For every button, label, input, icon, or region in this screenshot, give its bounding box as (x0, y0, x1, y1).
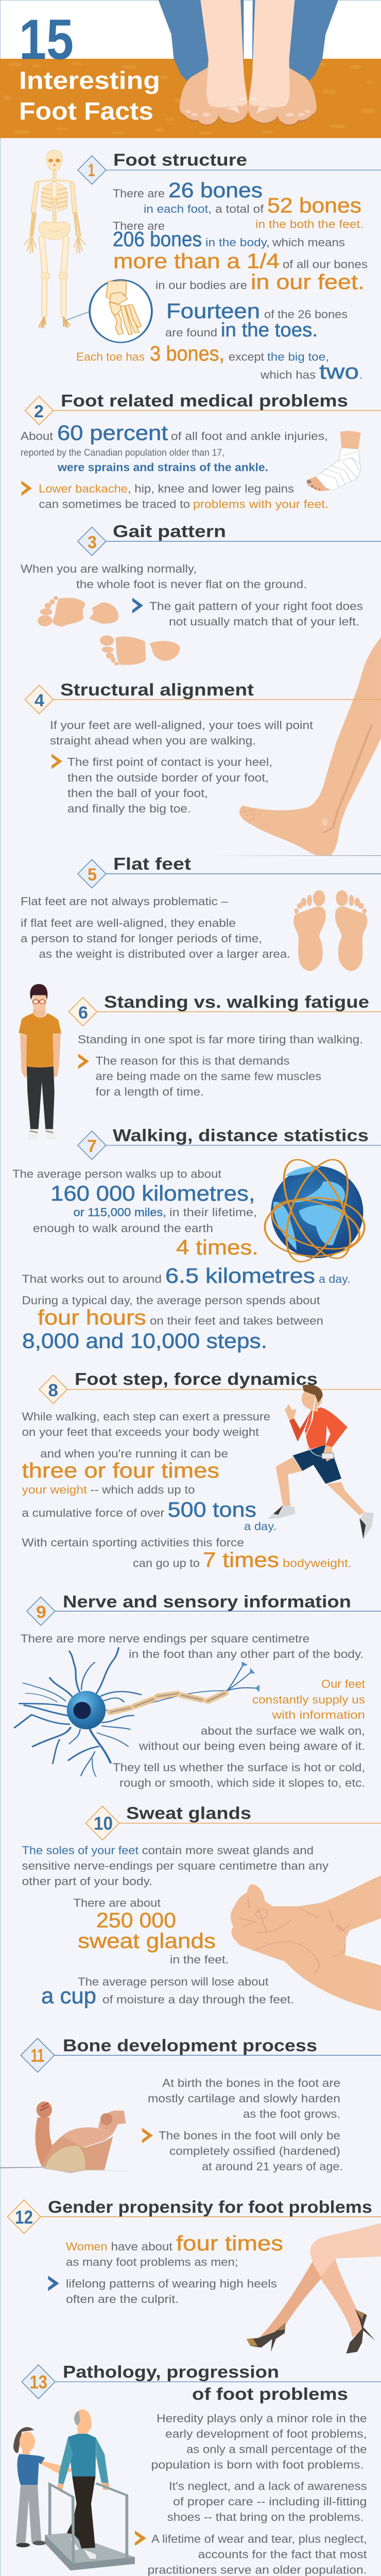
heading: Structural alignment (60, 680, 254, 699)
text block: sensitive nerve-endings per square centimetre than any (22, 1859, 328, 1872)
text block: back pain: , hip, knee and lower leg pains (128, 482, 294, 495)
text block: pressure: and when you're running it can be (40, 1447, 228, 1460)
text block: daily figures: four hours (38, 1306, 146, 1329)
text block: When you are walking normally, (21, 563, 197, 575)
text block: heredity: early development of foot problems, (165, 2428, 367, 2441)
text block: bone counts: in our feet. (251, 270, 365, 294)
illustration: legs in high heels (247, 2223, 381, 2353)
text block: 250 000 (96, 1908, 176, 1932)
text block: ossified (159, 2129, 343, 2173)
text block: contact order: then the ball of your foot, (67, 787, 208, 800)
text block: pressure (22, 1410, 352, 1572)
text block: bone counts: There are (113, 187, 165, 200)
text block: contact order (67, 756, 272, 815)
heading: Gait pattern (113, 522, 226, 541)
text block: pressure: on your feet that exceeds your body weight (22, 1426, 259, 1438)
text block: pressure: three or four times (22, 1459, 219, 1482)
text block: daily figures: 8,000 and 10,000 steps. (22, 1329, 267, 1353)
text block: bone counts: in the body, (205, 236, 270, 249)
text block: The average person will lose about (78, 1975, 269, 1988)
text block: nerve endings: constantly supply us (252, 1693, 365, 1706)
text block: bone counts: . (359, 368, 362, 381)
text block: ossified: at around 21 years of age. (202, 2160, 343, 2173)
text block: sprains (21, 421, 328, 473)
text block: heredity: as only a small percentage of the (186, 2443, 367, 2456)
text block (148, 2077, 340, 2121)
text block: The soles of your feet (22, 1844, 138, 1857)
icon: chevron (51, 754, 62, 769)
text block: wear and tear: accounts for the fact that most (198, 2548, 367, 2561)
badge 2: 2 (34, 402, 44, 421)
text block: nerve endings: rough or smooth, which side it slopes to, etc. (119, 1776, 365, 1789)
text block: pressure: While walking, each step can exert a pressure (22, 1410, 270, 1423)
badge 12 (7, 2200, 41, 2233)
illustration: sole of foot (231, 1875, 381, 2011)
text block: If your feet are well-aligned, your toes will point (50, 719, 313, 732)
heading: Gender propensity for foot problems (48, 2197, 372, 2216)
text block: bone counts: which has (260, 368, 316, 381)
text block: pressure: bodyweight. (283, 1557, 352, 1570)
illustration: therapist and patient (13, 2410, 135, 2570)
panel: 6 standing vs walking (19, 984, 381, 1140)
text block: daily figures: a day. (319, 1273, 350, 1285)
panel: 2 foot related medical problems (21, 391, 381, 511)
icon: flat foot soles (293, 890, 367, 971)
heading: Foot related medical problems (61, 391, 348, 410)
text block: nerve endings: They tell us whether the surface is hot or cold, (113, 1761, 365, 1774)
text block: nerve endings (21, 1632, 365, 1789)
text block: bone counts: the big toe, (267, 350, 329, 363)
text block: heredity: of proper care -- including ill-fitting (173, 2495, 367, 2508)
text block: pressure: -- which adds up to (91, 1483, 195, 1496)
heading: Flat feet (113, 854, 191, 873)
illustration: globe (260, 1155, 371, 1266)
text block: heredity: shoes -- that bring on the problems. (167, 2511, 363, 2523)
text block: bone counts: a total of (215, 202, 264, 215)
text block: wear and tear (147, 2533, 367, 2576)
heading: Standing vs. walking fatigue (104, 992, 369, 1011)
text block: bone counts: 3 bones, (150, 342, 224, 365)
title: Foot Facts: Foot Facts (19, 98, 153, 125)
text block: contain more sweat glands and (142, 1844, 314, 1857)
panel: 1 foot structure (66, 150, 381, 383)
text block (50, 719, 313, 747)
text block: heredity: population is born with foot problems. (151, 2459, 363, 2471)
text block: four times (176, 2231, 283, 2255)
text block: bone counts: in our bodies are (155, 279, 247, 292)
text block: There are about (73, 1896, 161, 1909)
illustration: baby (0, 2102, 129, 2173)
text block: nerve endings: There are more nerve endings per square centimetre (21, 1632, 309, 1645)
panel: 4 structural alignment (25, 637, 381, 856)
illustration: foot walking (239, 637, 381, 856)
badge 10: 10 (94, 1813, 113, 1834)
text block: a person to stand for longer periods of time, (21, 932, 262, 945)
text block: bone counts: in each foot, (144, 202, 212, 215)
text block: as the weight is distributed over a larger area. (39, 947, 290, 960)
heading: Walking, distance statistics (113, 1126, 369, 1145)
text block: bone counts: 52 bones (267, 194, 361, 217)
orange band (0, 59, 381, 138)
text block: lifetime distance: in their lifetime, (169, 1206, 257, 1219)
text block: gait mismatch (149, 600, 363, 628)
panel: 8 foot step force dynamics (22, 1369, 381, 1572)
heading: Foot step, force dynamics (75, 1369, 318, 1388)
illustration: bare feet and jeans (159, 0, 338, 126)
text block: reason (96, 1055, 321, 1098)
icon: chevron (132, 598, 143, 614)
panel: 5 flat feet (21, 854, 381, 971)
text block (22, 1844, 328, 2008)
badge 3: 3 (88, 533, 97, 552)
text block: bone counts: two (319, 360, 359, 383)
text block: as many foot problems as men; (66, 2256, 238, 2268)
text block: ossified: The bones in the foot will only be (159, 2129, 340, 2142)
badge 9: 9 (36, 1602, 46, 1622)
badge 6: 6 (78, 1003, 88, 1023)
text block: back pain: Lower backache (39, 482, 128, 495)
text block: other part of your body. (22, 1875, 152, 1888)
text block: bone counts: 26 bones (168, 178, 263, 202)
text block: reason: are being made on the same few muscles (96, 1070, 321, 1083)
text block: bone counts: which means (272, 236, 345, 249)
text block: heredity: It's neglect, and a lack of awareness (169, 2480, 367, 2493)
text block: nerve endings: about the surface we walk on, (201, 1724, 365, 1737)
text block: a cup (41, 1983, 96, 2008)
text block: daily figures: During a typical day, the average person spends about (22, 1294, 320, 1307)
badge 1: 1 (88, 161, 95, 180)
icon: bandaged ankle (307, 431, 361, 491)
text block: high heels: often are the culprit. (66, 2293, 179, 2306)
text block: mostly cartilage and slowly harden (148, 2092, 340, 2105)
text block: bone counts: of all our bones (283, 258, 368, 271)
text block: contact order: The first point of contact is your heel, (67, 756, 272, 769)
heading: Foot structure (113, 150, 247, 170)
text block: daily figures (22, 1264, 350, 1353)
text block: nerve endings: without our being even being aware of it. (138, 1740, 365, 1753)
icon: chevron (22, 481, 32, 496)
text block: bone counts: more than a 1/4 (113, 249, 280, 273)
badge 6 (69, 997, 97, 1026)
badge 5: 5 (88, 865, 97, 885)
panel: 13 pathology (13, 2362, 381, 2576)
text block: sprains: of all foot and ankle injuries, (171, 430, 328, 443)
text block: bone counts (76, 178, 368, 383)
badge 7: 7 (87, 1137, 97, 1156)
panel: 9 nerve and sensory information (14, 1592, 381, 1789)
illustration: standing man (19, 984, 61, 1140)
badge 9 (27, 1597, 55, 1625)
text block: sprains: reported by the Canadian population older than 17, (21, 447, 224, 457)
icon: magnified foot bones (66, 280, 152, 343)
text block: back pain (39, 482, 328, 511)
badge 13: 13 (30, 2371, 47, 2393)
text block: straight ahead when you are walking. (50, 734, 256, 747)
text block: contact order: and finally the big toe. (67, 802, 191, 815)
heading: Nerve and sensory information (63, 1592, 351, 1611)
badge 11: 11 (31, 2045, 44, 2066)
text block: pressure: can go up to (133, 1557, 200, 1570)
text block: lifetime distance: 4 times. (176, 1235, 258, 1259)
text block: gait mismatch: not usually match that of your left. (169, 615, 359, 628)
text block: nerve endings: Our feet (321, 1677, 365, 1690)
text block: bone counts: Fourteen (166, 299, 260, 323)
text block: the whole foot is never flat on the ground. (76, 578, 307, 591)
badge 1 (78, 156, 106, 184)
text block: daily figures: on their feet and takes between (150, 1314, 323, 1327)
text block: Women (66, 2240, 108, 2253)
badge 7 (78, 1131, 106, 1160)
panel: header (0, 0, 381, 138)
text block: bone counts: are found (165, 326, 217, 339)
text block: pressure: a cumulative force of over (22, 1506, 165, 1519)
text block: sprains: were sprains and strains of the ankle. (57, 461, 268, 473)
icon: chevron (142, 2128, 153, 2143)
text block: bone counts: in the both the feet. (255, 218, 363, 231)
badge 5 (78, 859, 106, 888)
text block: reason: for a length of time. (96, 1086, 204, 1098)
text block: if flat feet are well-aligned, they enable (21, 917, 236, 929)
badge 2 (25, 396, 53, 425)
text block: lifetime distance (12, 1167, 258, 1259)
title: 15: 15 (19, 8, 74, 71)
title: Interesting: Interesting (19, 67, 160, 95)
text block: ossified: completely ossified (hardened) (169, 2145, 340, 2158)
icon: chevron (48, 2276, 59, 2291)
text block: bone counts: in the toes. (221, 319, 318, 341)
text block: Flat feet are not always problematic – (21, 895, 229, 908)
text block: lifetime distance: The average person walks up to about (12, 1167, 221, 1180)
text block: contact order: then the outside border of your foot, (67, 771, 269, 784)
badge 13 (22, 2365, 55, 2399)
text block (66, 2231, 283, 2268)
badge 8: 8 (48, 1381, 58, 1400)
heading (63, 2362, 348, 2403)
text block: heredity (151, 2412, 367, 2523)
text block: pressure: With certain sporting activities this force (22, 1536, 244, 1549)
text block: nerve endings: with information (271, 1708, 365, 1721)
text block: in the feet. (170, 1953, 229, 1966)
text block: bone counts: 206 bones (113, 227, 202, 251)
heading: Sweat glands (126, 1804, 251, 1823)
text block: high heels (66, 2277, 277, 2306)
text block: back pain: problems with your feet. (193, 498, 328, 511)
panel: 12 gender propensity (7, 2197, 381, 2353)
text block (21, 563, 307, 591)
illustration: runner (267, 1385, 374, 1539)
badge 10 (85, 1806, 119, 1840)
badge 3 (78, 527, 106, 555)
text block: reason: The reason for this is that demands (96, 1055, 289, 1067)
text block: wear and tear: practitioners serve an older population. (147, 2564, 367, 2576)
text block: of moisture a day through the feet. (102, 1993, 294, 2006)
text block: lifetime distance: or 115,000 miles, (73, 1206, 166, 1219)
text block: heredity: Heredity plays only a minor role in the (157, 2412, 367, 2425)
panel: 7 walking distance statistics (12, 1126, 381, 1353)
text block: Standing in one spot is far more tiring than walking. (78, 1033, 363, 1046)
text block: sprains: 60 percent (57, 421, 168, 445)
icon: chevron (135, 2531, 146, 2546)
heading: of foot problems (192, 2384, 348, 2403)
text block: bone counts: except (229, 350, 264, 363)
text block: nerve endings: in the foot than any other part of the body. (129, 1648, 363, 1660)
text block: have about (111, 2240, 172, 2253)
badge 4: 4 (34, 691, 44, 710)
text block: bone counts: Each toe has (76, 350, 145, 363)
text block: high heels: lifelong patterns of wearing high heels (66, 2277, 277, 2290)
text block: pressure: 7 times (203, 1548, 279, 1572)
text block: lifetime distance: enough to walk around the earth (33, 1222, 213, 1235)
illustration: neuron (14, 1648, 259, 1776)
text block: sweat glands (78, 1929, 216, 1953)
panel: 10 sweat glands (22, 1804, 381, 2011)
text block: sprains: About (21, 430, 53, 443)
heading: Pathology, progression (63, 2362, 279, 2381)
text block: daily figures: 6.5 kilometres (165, 1264, 315, 1287)
text block: as the foot grows. (243, 2108, 340, 2121)
text block: back pain: can sometimes be traced to (39, 498, 190, 511)
badge 12: 12 (15, 2207, 33, 2228)
text block: daily figures: That works out to around (22, 1273, 162, 1285)
badge 8 (39, 1375, 67, 1403)
text block: wear and tear: A lifetime of wear and tear, plus neglect, (151, 2533, 367, 2546)
text block: gait mismatch: The gait pattern of your right foot does (149, 600, 363, 613)
panel: 11 bone development (0, 2036, 381, 2173)
icon: chevron (78, 1054, 89, 1069)
text block (21, 895, 290, 960)
text block: pressure: a day. (244, 1520, 276, 1533)
text block: lifetime distance: 160 000 kilometres, (50, 1181, 255, 1206)
heading: Bone development process (63, 2036, 317, 2055)
illustration: skeleton (24, 150, 85, 328)
text block: bone counts: There are (113, 219, 165, 232)
text block: pressure: your weight (22, 1483, 87, 1496)
badge 4 (25, 685, 53, 714)
text block: bone counts: of the 26 bones (264, 308, 348, 320)
badge 11 (21, 2038, 55, 2072)
panel: 3 gait pattern (21, 522, 381, 666)
text block: pressure: 500 tons (168, 1498, 256, 1521)
text block: At birth the bones in the foot are (162, 2077, 340, 2090)
icon: footprints (38, 596, 180, 666)
